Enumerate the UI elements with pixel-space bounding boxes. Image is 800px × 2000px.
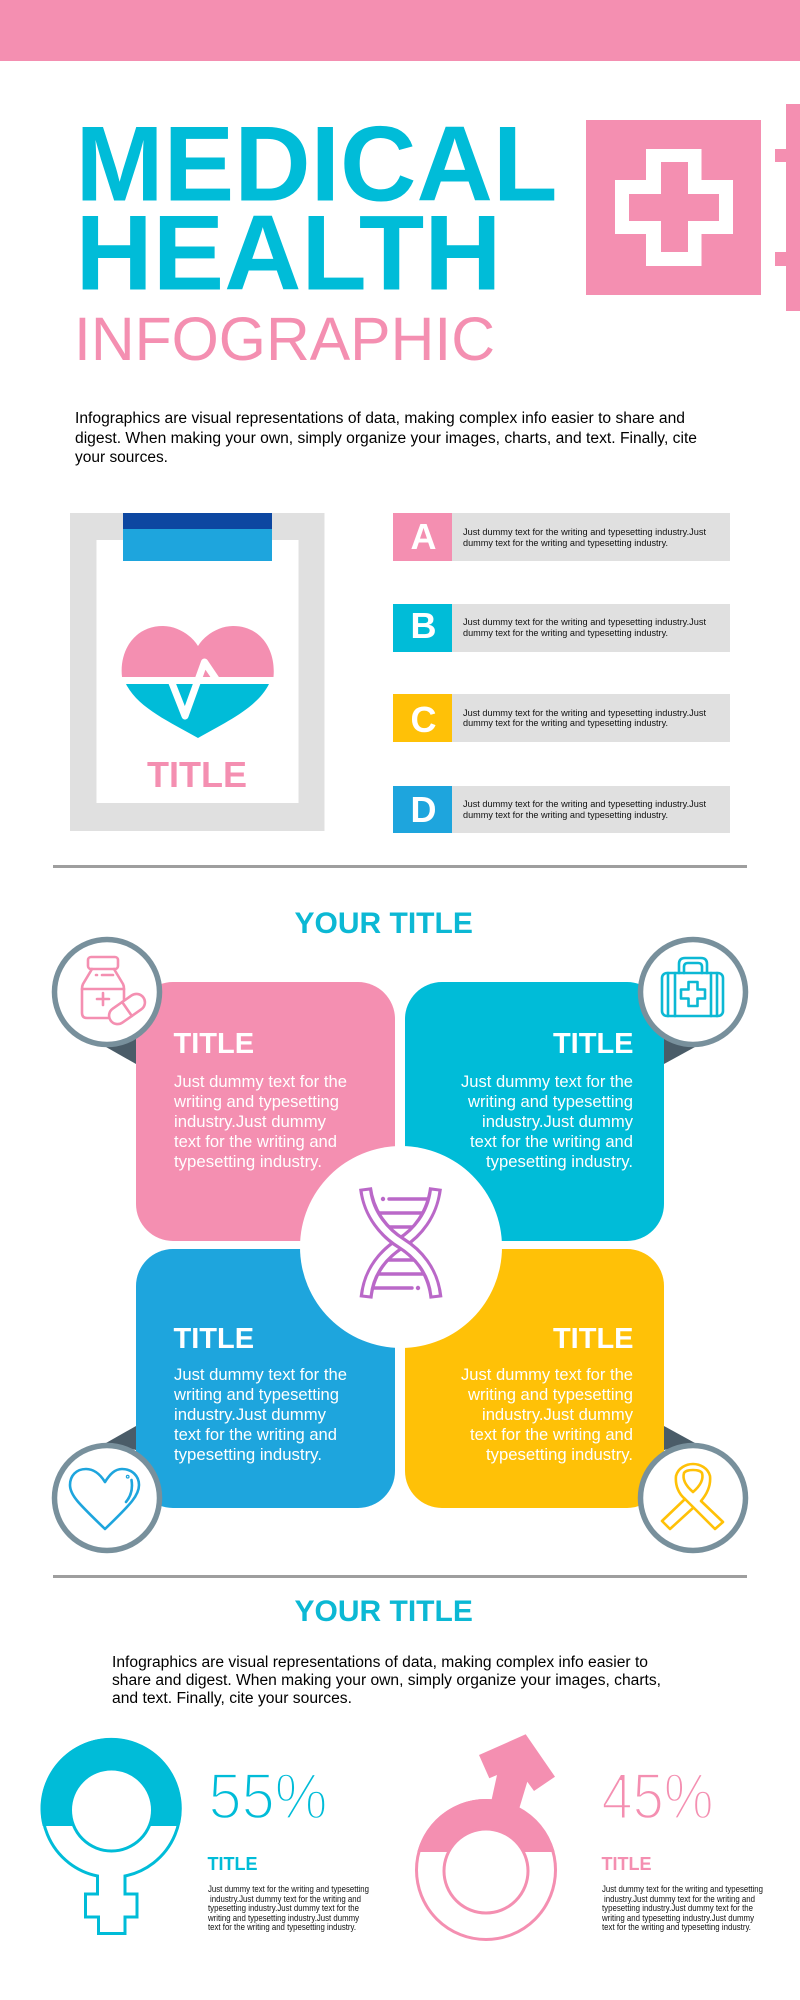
title <box>74 104 558 373</box>
intro paragraph: your sources. <box>75 449 168 466</box>
stat: 55 percent: 55% <box>208 1760 328 1832</box>
panel: yellow quadrant: text for the writing and <box>470 1426 633 1444</box>
panel: pink quadrant: typesetting industry. <box>174 1153 322 1171</box>
panel: pink quadrant: TITLE <box>174 1028 254 1060</box>
panel: teal quadrant: industry.Just dummy <box>482 1113 634 1131</box>
clipboard panel <box>70 513 324 831</box>
panel: teal quadrant: Just dummy text for the <box>461 1073 633 1091</box>
panel: pink quadrant: text for the writing and <box>174 1133 337 1151</box>
panel: teal quadrant: TITLE <box>553 1028 634 1060</box>
top banner <box>0 0 800 61</box>
panel: blue quadrant: text for the writing and <box>174 1426 337 1444</box>
female text block: TITLE <box>208 1854 258 1874</box>
male text block: typesetting industry.Just dummy text for the <box>602 1903 753 1913</box>
list item A: A <box>410 516 436 557</box>
list item B: B <box>410 605 436 646</box>
male text block: text for the writing and typesetting industry. <box>602 1922 751 1932</box>
female text block: typesetting industry.Just dummy text for the <box>208 1903 359 1913</box>
badge: heart <box>54 1426 160 1550</box>
intro paragraph <box>75 410 697 466</box>
icon: heart with pulse <box>118 626 278 738</box>
panel: yellow quadrant: TITLE <box>553 1323 634 1355</box>
panel: blue quadrant: industry.Just dummy <box>174 1406 327 1424</box>
panel: teal quadrant: text for the writing and <box>470 1133 633 1151</box>
list item C: C <box>410 699 436 740</box>
icon: first aid kit <box>662 958 723 1016</box>
panel: yellow quadrant: writing and typesetting <box>467 1386 633 1404</box>
list item A: dummy text for the writing and typesetting industry. <box>463 538 668 548</box>
icon: DNA in centre circle <box>300 1146 502 1348</box>
list item B: dummy text for the writing and typesetting industry. <box>463 628 668 638</box>
list item C: Just dummy text for the writing and typesetting industry.Just <box>463 708 707 718</box>
panel: pink quadrant: writing and typesetting <box>173 1093 339 1111</box>
section heading: YOUR TITLE <box>294 907 473 940</box>
panel: yellow quadrant <box>405 1249 664 1508</box>
badge: awareness ribbon <box>640 1426 746 1550</box>
title: INFOGRAPHIC <box>74 305 495 373</box>
icon: female symbol <box>41 1738 182 1934</box>
section paragraph: share and digest. When making your own, simply organize your images, charts, <box>112 1672 661 1689</box>
list item D <box>393 786 730 833</box>
list item C: dummy text for the writing and typesetting industry. <box>463 718 668 728</box>
list item D: Just dummy text for the writing and typesetting industry.Just <box>463 799 707 809</box>
icon: medical cross sign <box>586 104 800 311</box>
panel: blue quadrant: typesetting industry. <box>174 1446 322 1464</box>
title: HEALTH <box>76 192 501 312</box>
list item D: D <box>410 789 436 830</box>
icon: awareness ribbon <box>662 1464 723 1529</box>
section heading: YOUR TITLE <box>294 1595 473 1628</box>
female text block: Just dummy text for the writing and typesetting <box>208 1884 369 1894</box>
panel: pink quadrant <box>136 982 395 1241</box>
panel: teal quadrant <box>405 982 664 1241</box>
badge: medicine bottle <box>54 940 160 1064</box>
stat: 45 percent: 45% <box>602 1760 714 1832</box>
section paragraph <box>112 1654 661 1707</box>
list item C <box>393 694 730 742</box>
male text block: Just dummy text for the writing and typesetting <box>602 1884 763 1894</box>
panel: yellow quadrant: typesetting industry. <box>486 1446 633 1464</box>
badge: first aid kit <box>640 940 746 1064</box>
female text block: industry.Just dummy text for the writing and <box>210 1894 361 1904</box>
panel: teal quadrant: writing and typesetting <box>467 1093 633 1111</box>
icon: male symbol <box>416 1734 556 1940</box>
female text block <box>207 1854 369 1932</box>
list item A <box>393 513 730 561</box>
list item D: dummy text for the writing and typesetting industry. <box>463 810 668 820</box>
male text block: TITLE <box>602 1854 652 1874</box>
title: MEDICAL <box>76 104 558 224</box>
clipboard title: TITLE <box>147 754 247 795</box>
section paragraph: Infographics are visual representations of data, making complex info easier to <box>112 1654 648 1671</box>
panel: blue quadrant <box>136 1249 395 1508</box>
male text block: industry.Just dummy text for the writing and <box>604 1894 755 1904</box>
panel: blue quadrant: TITLE <box>174 1323 254 1355</box>
panel: blue quadrant: Just dummy text for the <box>174 1366 347 1384</box>
female text block: text for the writing and typesetting industry. <box>208 1922 356 1932</box>
panel: blue quadrant: writing and typesetting <box>173 1386 339 1404</box>
panel: teal quadrant: typesetting industry. <box>486 1153 633 1171</box>
panel: yellow quadrant: Just dummy text for the <box>461 1366 633 1384</box>
panel: yellow quadrant: industry.Just dummy <box>482 1406 634 1424</box>
panel: pink quadrant: Just dummy text for the <box>174 1073 347 1091</box>
section paragraph: and text. Finally, cite your sources. <box>112 1690 352 1707</box>
list item B <box>393 604 730 652</box>
intro paragraph: Infographics are visual representations of data, making complex info easier to share and <box>75 410 685 427</box>
female text block: writing and typesetting industry.Just dummy <box>207 1913 360 1923</box>
clipboard clip <box>123 513 272 561</box>
male text block <box>601 1854 763 1932</box>
intro paragraph: digest. When making your own, simply organize your images, charts, and text. Finally, cite <box>75 430 697 447</box>
icon: medicine bottle and pill <box>82 957 148 1027</box>
icon: heart outline <box>70 1469 139 1529</box>
list item A: Just dummy text for the writing and typesetting industry.Just <box>463 527 707 537</box>
panel: pink quadrant: industry.Just dummy <box>174 1113 327 1131</box>
list item B: Just dummy text for the writing and typesetting industry.Just <box>463 617 707 627</box>
male text block: writing and typesetting industry.Just dummy <box>601 1913 755 1923</box>
